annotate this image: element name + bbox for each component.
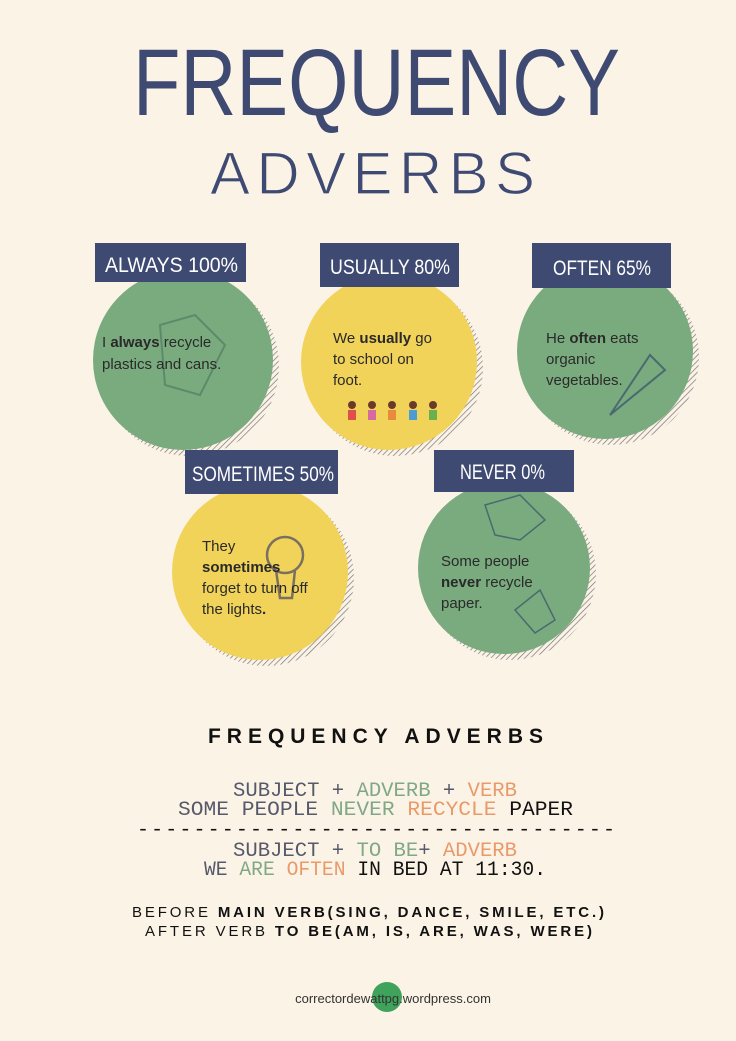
- label: never: NEVER 0%: [460, 461, 545, 484]
- panel: often: vegetables.: [546, 372, 623, 389]
- title: FREQUENCY: [133, 30, 620, 136]
- label: usually: USUALLY 80%: [330, 256, 450, 279]
- panel: usually: We usually go: [333, 330, 432, 347]
- icon: kids: [348, 401, 437, 420]
- label: often: [532, 243, 671, 288]
- label: often: OFTEN 65%: [553, 257, 651, 280]
- icon: carrot: [610, 355, 665, 415]
- formula block: WE ARE OFTEN IN BED AT 11:30.: [204, 859, 546, 882]
- title: ADVERBS: [210, 140, 535, 207]
- label: always: ALWAYS 100%: [105, 254, 238, 277]
- title: [133, 30, 620, 207]
- panel: often: [517, 243, 699, 445]
- panel: sometimes: They: [202, 538, 236, 555]
- panel: never: paper.: [441, 595, 483, 612]
- panel: always: plastics and cans.: [102, 356, 221, 373]
- panel: never: Some people: [441, 553, 529, 570]
- panel: usually: to school on: [333, 351, 414, 368]
- footer: [295, 982, 491, 1012]
- rules text: BEFORE MAIN VERB(SING, DANCE, SMILE, ETC.): [132, 904, 604, 921]
- formula block: SOME PEOPLE NEVER RECYCLE PAPER: [178, 799, 573, 822]
- icon: paper: [515, 590, 555, 633]
- panel: sometimes: sometimes: [202, 559, 280, 576]
- panel: usually: [301, 243, 483, 456]
- panel: never: [418, 450, 596, 660]
- panel: always: I always recycle: [102, 334, 211, 351]
- label: sometimes: SOMETIMES 50%: [192, 463, 334, 486]
- rules text: [132, 904, 604, 940]
- heading: frequency adverbs: FREQUENCY ADVERBS: [208, 725, 543, 748]
- rules text: AFTER VERB TO BE(AM, IS, ARE, WAS, WERE): [145, 923, 592, 940]
- panel: usually: foot.: [333, 372, 362, 389]
- icon: can: [160, 315, 225, 395]
- icon: box: [485, 495, 545, 540]
- formula block: SUBJECT + TO BE+ ADVERB: [233, 840, 517, 863]
- panel: sometimes: the lights.: [202, 601, 266, 618]
- formula block: [137, 780, 615, 882]
- icon: bulb: [267, 537, 303, 598]
- label: sometimes: [185, 450, 338, 494]
- formula block: SUBJECT + ADVERB + VERB: [233, 780, 517, 803]
- panel: never: never recycle: [441, 574, 533, 591]
- footer: correctordewattpg.wordpress.com: [295, 991, 491, 1006]
- formula block: ----------------------------------: [137, 819, 615, 842]
- panel: often: organic: [546, 351, 596, 368]
- panel: often: He often eats: [546, 330, 639, 347]
- panel: sometimes: forget to turn off: [202, 580, 308, 597]
- label: always: [95, 243, 246, 282]
- panel: always: [93, 243, 279, 456]
- panel: sometimes: [172, 450, 354, 666]
- label: never: [434, 450, 574, 492]
- label: usually: [320, 243, 459, 287]
